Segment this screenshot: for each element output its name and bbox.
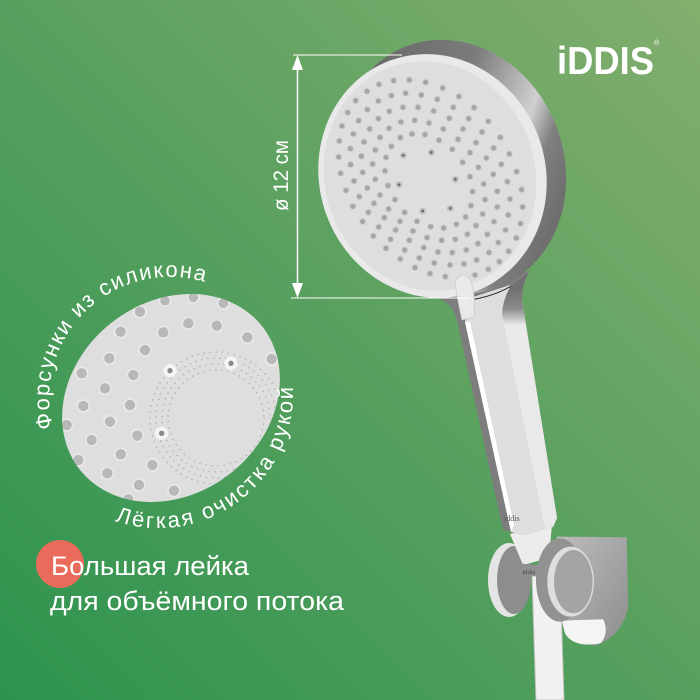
nozzles on head (336, 77, 526, 280)
central jets on head (397, 150, 458, 213)
shower head chrome back (303, 7, 601, 327)
black seam under head (470, 286, 511, 300)
hose clip tab (455, 275, 474, 320)
curved label: easy hand cleaning: Лёгкая очистка рукой (115, 388, 293, 528)
headline (50, 551, 345, 616)
logo: ® (654, 39, 660, 47)
headline: Большая лейка (51, 551, 250, 581)
close-up nozzles (61, 292, 278, 505)
shower handle: iddis (504, 514, 520, 523)
accent circle (36, 540, 84, 588)
curved label: silicone nozzles: Форсунки из силикона (36, 265, 205, 428)
handle collar (510, 524, 552, 565)
panel: nozzle close-up (62, 294, 280, 502)
dimension: diameter 12 cm (270, 55, 470, 298)
shower head face (284, 22, 581, 330)
bracket body: iddis (522, 569, 536, 576)
shower handle (438, 270, 557, 535)
headline: для объёмного потока (50, 586, 345, 616)
close-up central jets (157, 359, 236, 438)
bracket body (515, 537, 628, 645)
icon: hand shower product (284, 7, 628, 700)
bracket left disc (488, 543, 531, 617)
logo: iDDIS (557, 40, 654, 83)
dimension label: ø 12 см (270, 140, 293, 211)
dotted rings (150, 352, 282, 484)
hose (532, 575, 564, 700)
